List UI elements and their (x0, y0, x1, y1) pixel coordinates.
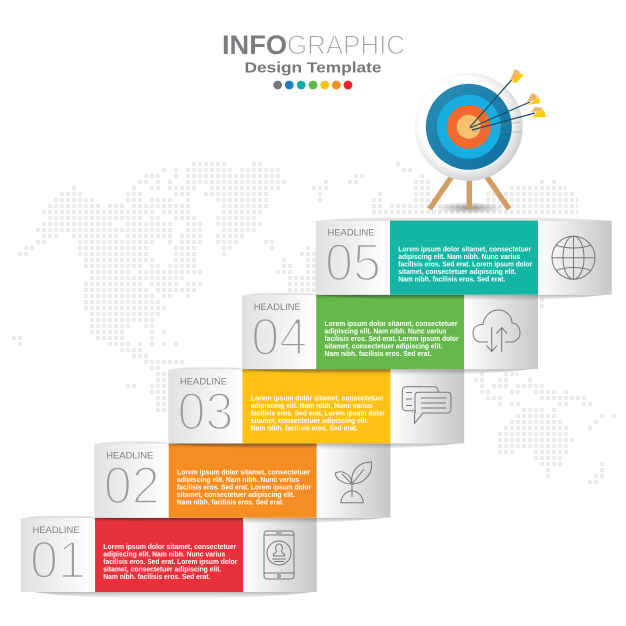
icon panel (317, 444, 390, 518)
body text: facilisis eros. Sed erat. Lorem ipsum dolor (398, 260, 532, 269)
body text: facilisis eros. Sed erat. Lorem ipsum dolor (103, 557, 237, 566)
number: 01 (30, 531, 86, 590)
title word: INFOGRAPHIC: INFO (222, 30, 287, 60)
cast shadow band (316, 295, 464, 299)
body text: Nam nibh. facilisis eros. Sed erat. (177, 498, 284, 507)
body text: Lorem ipsum dolor sitamet, consectetuer (251, 393, 384, 402)
icon panel (243, 518, 317, 592)
icon: target with arrows on easel (415, 69, 546, 214)
body text (398, 245, 532, 284)
left panel (168, 369, 242, 443)
bottom shadow (168, 443, 460, 449)
body text: sitamet, consectetuer adipiscing elit. (251, 416, 369, 425)
body text: Nam nibh. facilisis eros. Sed erat. (103, 572, 210, 581)
number: 03 (178, 382, 234, 441)
title word: INFOGRAPHIC: GRAPHIC (287, 30, 405, 60)
cast shadow band (242, 369, 390, 373)
icon: cloud upload and download (473, 310, 520, 352)
body text: facilisis eros. Sed erat. Lorem ipsum dolor (251, 408, 385, 417)
left panel (21, 518, 95, 592)
headline: HEADLINE (328, 228, 374, 238)
headline: HEADLINE (180, 376, 227, 386)
step 05 (316, 216, 612, 301)
headline: HEADLINE (254, 302, 301, 312)
icon: sprout (335, 462, 372, 503)
body text: sitamet, consectetuer adipiscing elit. (103, 564, 221, 574)
body text: adipiscing elit. Nam nibh. Nunc varius (398, 252, 520, 261)
colour panel (169, 444, 317, 518)
number: 05 (325, 234, 381, 293)
top shadow (24, 515, 100, 518)
body text: adipiscing elit. Nam nibh. Nunc varius (177, 475, 299, 484)
body text: Lorem ipsum dolor sitamet, consectetuer (103, 542, 236, 551)
step 04 (242, 292, 538, 375)
body text (177, 468, 311, 507)
body text: facilisis eros. Sed erat. Lorem ipsum dolor (177, 483, 311, 492)
colour panel (242, 369, 390, 443)
arrow fletching (510, 69, 546, 117)
title word: INFOGRAPHIC (222, 30, 405, 60)
arrows (470, 76, 535, 130)
body text: Lorem ipsum dolor sitamet, consectetuer (177, 468, 310, 477)
body text (325, 319, 459, 358)
bottom shadow (95, 518, 386, 524)
colour panel (316, 295, 464, 369)
headline: HEADLINE (106, 451, 153, 461)
subtitle: Design Template (244, 60, 382, 76)
body text: Nam nibh. facilisis eros. Sed erat. (398, 275, 505, 284)
step 03 (168, 366, 464, 449)
icon panel (464, 295, 538, 369)
body text: Nam nibh. facilisis eros. Sed erat. (325, 349, 432, 358)
icon: globe (552, 236, 595, 279)
bottom shadow (242, 369, 533, 375)
body text: Lorem ipsum dolor sitamet, consectetuer (398, 245, 531, 254)
icon panel (390, 369, 464, 443)
body text: adipiscing elit. Nam nibh. Nunc varius (325, 327, 447, 336)
arrow shadows (472, 122, 522, 132)
top shadow (245, 292, 321, 295)
body text: Lorem ipsum dolor sitamet, consectetuer (325, 319, 458, 328)
icon: smartphone (264, 531, 294, 579)
number: 02 (104, 457, 160, 516)
icon panel (538, 221, 612, 295)
left panel (316, 221, 390, 295)
top shadow (172, 366, 248, 369)
body text: Nam nibh. facilisis eros. Sed erat. (251, 423, 358, 432)
body text (251, 393, 385, 432)
left panel (94, 444, 169, 518)
title (222, 30, 405, 89)
headline: HEADLINE (32, 525, 80, 535)
top shadow (319, 216, 611, 221)
target face (415, 73, 523, 181)
easel shadow (434, 202, 506, 214)
body text: adipiscing elit. Nam nibh. Nunc varius (251, 401, 373, 410)
cast shadow band (168, 443, 316, 447)
body text: sitamet, consectetuer adipiscing elit. (398, 267, 516, 276)
body text: adipiscing elit. Nam nibh. Nunc varius (103, 550, 225, 558)
step 02 (94, 440, 390, 524)
colour dots (273, 81, 352, 89)
left panel (242, 295, 316, 369)
body text: sitamet, consectetuer adipiscing elit. (177, 490, 295, 499)
bottom shadow (316, 295, 607, 301)
easel legs (430, 177, 509, 209)
step 01 (21, 515, 317, 599)
number: 04 (251, 308, 307, 367)
icon: speech bubbles (402, 387, 451, 423)
top shadow (98, 440, 174, 444)
body text: sitamet, consectetuer adipiscing elit. (325, 342, 443, 351)
colour panel (95, 518, 243, 592)
colour panel (390, 221, 538, 295)
cast shadow band (95, 518, 243, 522)
body text: facilisis eros. Sed erat. Lorem ipsum dolor (325, 334, 459, 343)
body text (103, 542, 237, 581)
bottom shadow (34, 592, 312, 599)
world map dotted background (12, 164, 616, 482)
